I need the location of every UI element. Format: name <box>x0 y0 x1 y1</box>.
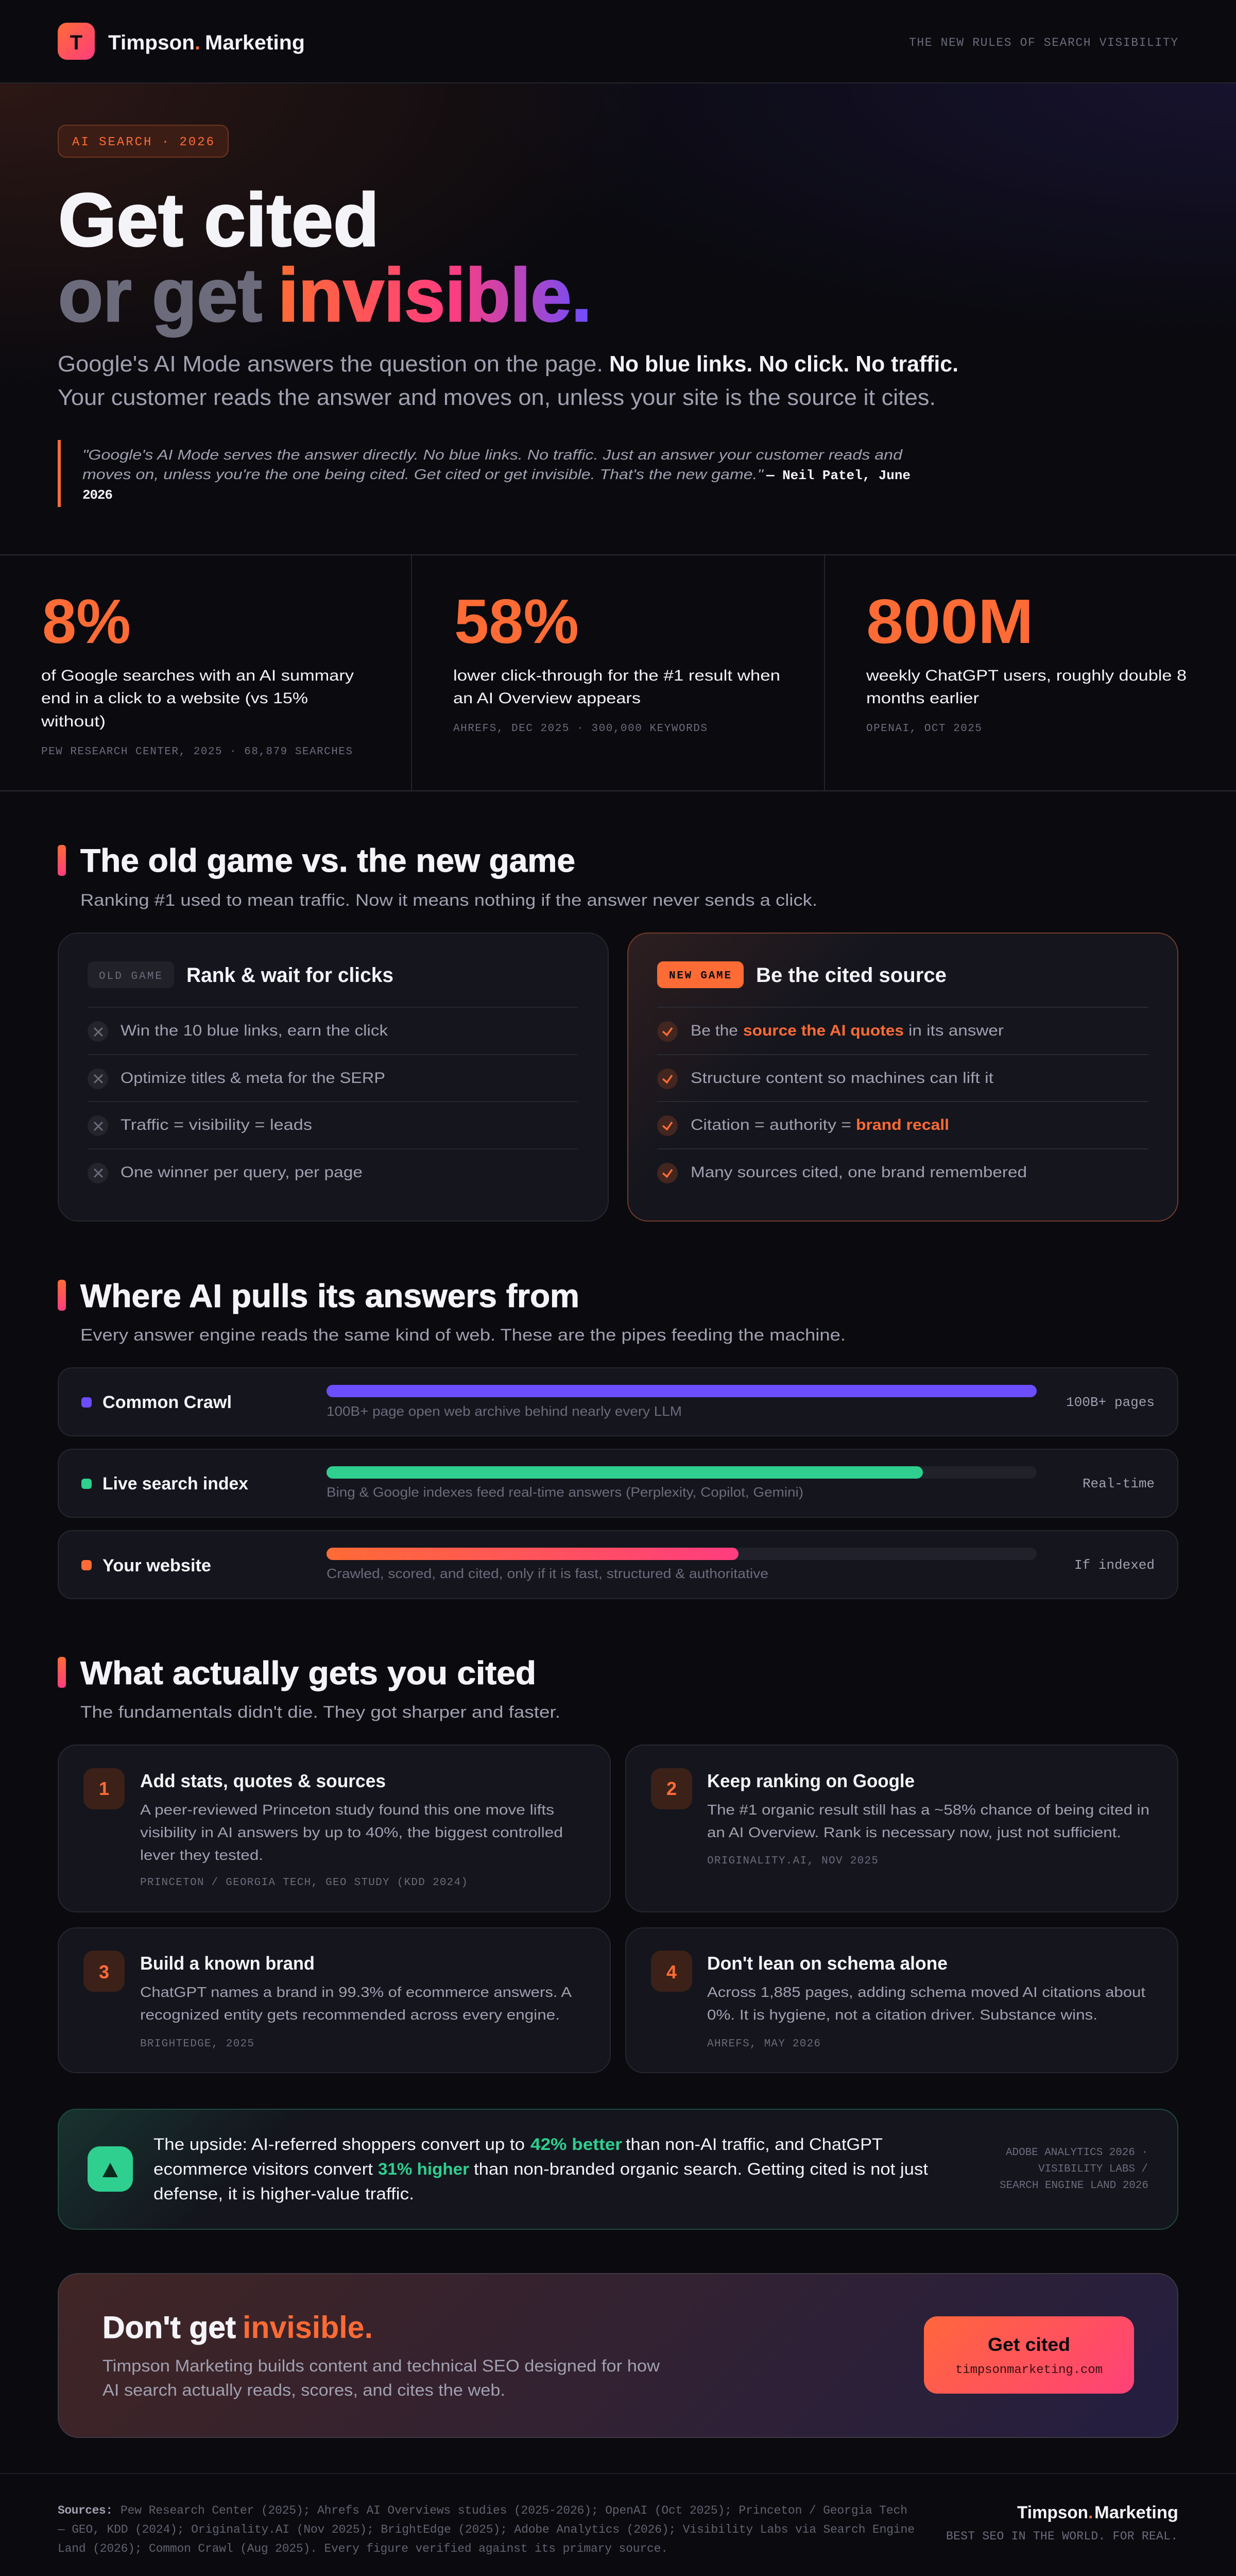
bar row: live search index: Live search index <box>102 1474 248 1494</box>
upside sources: VISIBILITY LABS / <box>1038 2163 1148 2175</box>
section heading: old vs new: The old game vs. the new game <box>80 843 575 879</box>
stat: 8%: end in a click to a website (vs 15% <box>41 690 308 707</box>
upside text: ecommerce visitors convert <box>153 2160 373 2178</box>
new item 4 <box>657 1163 1027 1183</box>
sources <box>57 2504 915 2555</box>
section heading: where AI pulls answers <box>58 1278 846 1344</box>
old item 4: One winner per query, per page <box>121 1164 363 1181</box>
footer brand: . <box>1088 2503 1093 2522</box>
upside text: 31% higher <box>378 2160 469 2178</box>
stat: 8%: 8% <box>42 586 131 656</box>
quote: moves on, unless you're the one being cited. Get cited or get invisible. That's the new game." <box>82 466 764 482</box>
upside text <box>153 2135 928 2203</box>
card 2 <box>626 1745 1178 1912</box>
hero subhead <box>58 351 958 410</box>
new item 3: brand recall <box>856 1116 949 1133</box>
hero <box>0 83 1236 554</box>
hero subhead: Your customer reads the answer and moves on, unless your site is the source it cites. <box>58 385 936 410</box>
hero subhead: No blue links. No click. No traffic. <box>609 351 958 377</box>
old item 2: Optimize titles & meta for the SERP <box>121 1070 385 1087</box>
new game title: Be the cited source <box>756 964 947 987</box>
bar row: your website: Crawled, scored, and cited, only if it is fast, structured & authoritative <box>327 1566 768 1581</box>
section heading: where AI pulls answers: Where AI pulls its answers from <box>80 1278 579 1314</box>
stat: 800M: 800M <box>866 586 1034 656</box>
stat: 800M: months earlier <box>866 690 979 707</box>
old item 3 <box>88 1115 312 1136</box>
card 3: recognized entity gets recommended across every engine. <box>140 2007 560 2023</box>
section heading: old vs new <box>58 843 817 909</box>
cta description: Timpson Marketing builds content and technical SEO designed for how <box>102 2357 660 2375</box>
bar row: live search index: Bing & Google indexes feed real-time answers (Perplexity, Copilot, Gemini) <box>327 1484 803 1500</box>
call to action <box>58 2274 1178 2437</box>
card 1: lever they tested. <box>140 1847 263 1863</box>
sources: Sources: <box>58 2504 113 2517</box>
stat: 800M: OPENAI, OCT 2025 <box>866 723 982 735</box>
cta button: timpsonmarketing.com <box>955 2363 1103 2377</box>
number badge 1 <box>83 1768 125 1809</box>
card 4: 0%. It is hygiene, not a citation driver. Substance wins. <box>707 2007 1097 2023</box>
panel: new game <box>628 933 1178 1221</box>
new item 1: source the AI quotes <box>743 1022 904 1039</box>
quote <box>58 440 911 507</box>
upside text: 42% better <box>530 2135 622 2154</box>
bar row: live search index <box>58 1449 1178 1517</box>
bar row: your website: If indexed <box>1074 1557 1155 1573</box>
card 1: Add stats, quotes & sources <box>140 1770 386 1791</box>
footer brand: Timpson <box>1017 2503 1088 2522</box>
hero headline: or get <box>58 253 262 337</box>
brand name: Marketing <box>205 31 305 54</box>
stat: 8% <box>41 586 354 758</box>
card 4: Across 1,885 pages, adding schema moved AI citations about <box>707 1984 1145 2000</box>
stat: 58% <box>453 586 780 735</box>
panel: old game <box>58 933 608 1221</box>
cta description: AI search actually reads, scores, and cites the web. <box>102 2381 505 2399</box>
hero subhead: Google's AI Mode answers the question on the page. <box>58 351 603 377</box>
number badge 2 <box>651 1768 692 1809</box>
cta description <box>102 2357 660 2399</box>
upside text: than non-branded organic search. Getting cited is not just <box>474 2160 928 2178</box>
stat: 8%: PEW RESEARCH CENTER, 2025 · 68,879 SEARCHES <box>41 746 352 758</box>
stat: 8%: of Google searches with an AI summary <box>41 667 354 684</box>
upside text: than non-AI traffic, and ChatGPT <box>626 2135 883 2154</box>
old game pill <box>88 961 174 988</box>
number badge 1: 1 <box>99 1778 109 1799</box>
number badge 3 <box>83 1951 125 1992</box>
stat: 58%: AHREFS, DEC 2025 · 300,000 KEYWORDS <box>453 723 707 735</box>
upside text: defense, it is higher-value traffic. <box>153 2184 414 2203</box>
stat: 800M: weekly ChatGPT users, roughly double 8 <box>866 667 1187 684</box>
section heading: old vs new: Ranking #1 used to mean traffic. Now it means nothing if the answer never sends a click. <box>80 891 817 909</box>
new item 3: Citation = authority = <box>691 1116 851 1133</box>
bar row: your website <box>58 1531 1178 1599</box>
card 3: ChatGPT names a brand in 99.3% of ecommerce answers. A <box>140 1984 572 2000</box>
card 3 <box>58 1928 610 2073</box>
hero headline: invisible. <box>278 253 592 337</box>
card 1: visibility in AI answers by up to 40%, the biggest controlled <box>140 1824 563 1840</box>
stats band <box>0 554 1236 791</box>
section heading: what gets you cited: The fundamentals didn't die. They got sharper and faster. <box>80 1703 560 1721</box>
old game pill: OLD GAME <box>99 971 162 982</box>
footer brand: Marketing <box>1094 2503 1178 2522</box>
stat: 58%: an AI Overview appears <box>453 690 641 707</box>
new item 2 <box>657 1069 994 1089</box>
card 1 <box>58 1745 610 1912</box>
card 2: Keep ranking on Google <box>707 1770 915 1791</box>
number badge 2: 2 <box>666 1778 677 1799</box>
footer brand <box>1017 2503 1178 2522</box>
old item 4 <box>88 1163 363 1183</box>
header <box>0 23 1236 83</box>
new item 1 <box>657 1021 1004 1042</box>
sources: Land (2026); Common Crawl (Aug 2025). Every figure verified against its primary source. <box>58 2542 668 2555</box>
cta headline <box>102 2310 373 2345</box>
old item 1: Win the 10 blue links, earn the click <box>121 1022 388 1039</box>
old item 3: Traffic = visibility = leads <box>121 1116 312 1133</box>
card 4 <box>626 1928 1178 2073</box>
section heading: what gets you cited: What actually gets you cited <box>80 1655 536 1691</box>
card 4: AHREFS, MAY 2026 <box>707 2038 820 2050</box>
badge: AI SEARCH · 2026 <box>72 135 214 149</box>
old item 1 <box>88 1021 388 1042</box>
new item 1: in its answer <box>908 1022 1004 1039</box>
brand name: . <box>195 31 200 54</box>
new item 1: Be the <box>691 1022 738 1039</box>
brand name <box>108 31 305 54</box>
cta button: Get cited <box>988 2334 1070 2355</box>
number badge 4 <box>651 1951 692 1992</box>
new item 3 <box>657 1115 949 1136</box>
header tagline: THE NEW RULES OF SEARCH VISIBILITY <box>909 36 1178 49</box>
footer <box>0 2473 1236 2555</box>
card 3: Build a known brand <box>140 1953 315 1974</box>
card 2: The #1 organic result still has a ~58% chance of being cited in <box>707 1802 1149 1818</box>
stat: 8%: without) <box>41 713 106 730</box>
hero headline <box>58 178 592 337</box>
section heading: what gets you cited <box>58 1655 560 1721</box>
old item 2 <box>88 1069 385 1089</box>
section heading: where AI pulls answers: Every answer engine reads the same kind of web. These are the pipes feeding the machine. <box>80 1326 846 1344</box>
quote: 2026 <box>82 487 113 503</box>
bar row: live search index: Real-time <box>1083 1476 1155 1492</box>
icon: logo mark: T <box>70 31 82 54</box>
upside sources: SEARCH ENGINE LAND 2026 <box>1000 2180 1148 2192</box>
upside sources: ADOBE ANALYTICS 2026 · <box>1006 2147 1148 2159</box>
stat: 58%: lower click-through for the #1 result when <box>453 667 780 684</box>
card 1: A peer-reviewed Princeton study found this one move lifts <box>140 1802 554 1818</box>
stat: 800M <box>866 586 1187 735</box>
number badge 3: 3 <box>99 1961 109 1982</box>
upside text: The upside: AI-referred shoppers convert up to <box>153 2135 525 2154</box>
hero headline: Get cited <box>58 178 379 262</box>
bar row: common crawl: 100B+ pages <box>1066 1395 1155 1410</box>
bar row: your website: Your website <box>102 1556 211 1575</box>
new item 4: Many sources cited, one brand remembered <box>691 1164 1027 1181</box>
new game pill: NEW GAME <box>669 970 731 982</box>
card 2: an AI Overview. Rank is necessary now, just not sufficient. <box>707 1824 1121 1840</box>
card 1: PRINCETON / GEORGIA TECH, GEO STUDY (KDD 2024) <box>140 1877 468 1889</box>
badge <box>58 125 228 157</box>
bar row: common crawl: Common Crawl <box>102 1393 232 1412</box>
stat: 58%: 58% <box>454 586 579 656</box>
callout: the upside <box>58 2109 1178 2229</box>
icon: up triangle <box>88 2146 133 2192</box>
quote: — Neil Patel, June <box>766 468 911 483</box>
footer tagline: BEST SEO IN THE WORLD. FOR REAL. <box>946 2530 1178 2543</box>
bar row: common crawl: 100B+ page open web archive behind nearly every LLM <box>327 1403 682 1419</box>
old game title: Rank & wait for clicks <box>186 964 393 987</box>
icon: logo mark <box>58 23 95 60</box>
card 4: Don't lean on schema alone <box>707 1953 948 1974</box>
quote: "Google's AI Mode serves the answer directly. No blue links. No traffic. Just an answer your customer reads and <box>82 447 903 463</box>
upside sources <box>1000 2147 1148 2192</box>
number badge 4: 4 <box>666 1961 677 1982</box>
brand name: Timpson <box>108 31 195 54</box>
cta headline: invisible. <box>243 2310 373 2345</box>
card 3: BRIGHTEDGE, 2025 <box>140 2038 254 2050</box>
new item 2: Structure content so machines can lift it <box>691 1070 994 1087</box>
sources: — GEO, KDD (2024); Originality.AI (Nov 2025); BrightEdge (2025); Adobe Analytics (2026); Visibility Labs via Search Engine <box>57 2523 915 2536</box>
new game pill <box>657 961 744 988</box>
cta headline: Don't get <box>102 2310 236 2345</box>
cta button <box>924 2316 1134 2394</box>
bar row: common crawl <box>58 1368 1178 1436</box>
card 2: ORIGINALITY.AI, NOV 2025 <box>707 1855 878 1867</box>
sources: Pew Research Center (2025); Ahrefs AI Overviews studies (2025-2026); OpenAI (Oct 2025); Princeton / Georgia Tech <box>121 2504 907 2517</box>
